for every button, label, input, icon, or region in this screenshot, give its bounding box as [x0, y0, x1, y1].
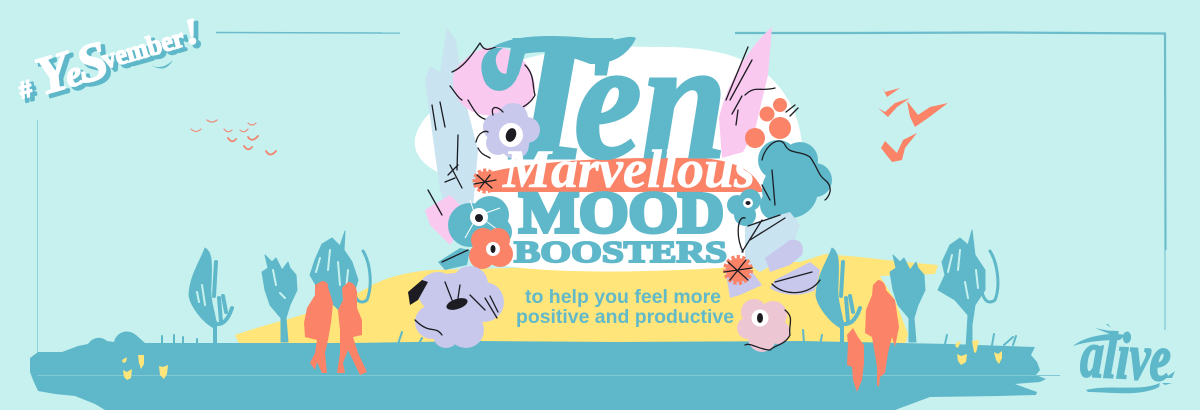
big lavender flower	[415, 266, 504, 348]
small teal flower	[727, 189, 761, 226]
tagline	[516, 286, 734, 328]
yesvember shadow: S	[73, 32, 119, 98]
left tree row	[189, 231, 370, 343]
teal flower with white veins	[448, 196, 512, 247]
lavender flower	[476, 103, 540, 159]
painted ground strip	[30, 331, 1046, 410]
teal leaf flower	[758, 140, 832, 220]
yesvember lettering: e	[60, 52, 87, 95]
yesvember lettering: vember	[99, 23, 188, 75]
teal leaf	[438, 248, 470, 270]
yesvember shadow: !	[183, 13, 208, 56]
couple walking	[304, 281, 367, 375]
coral flower small	[475, 171, 495, 191]
title: Ten	[481, 0, 727, 196]
right bouquet	[719, 27, 832, 352]
small arc birds	[191, 120, 276, 154]
title: Ten: T	[496, 0, 611, 196]
right tree row	[816, 230, 998, 348]
pink petals	[453, 47, 535, 115]
coral flower	[469, 228, 513, 269]
white cloud backdrop	[415, 46, 802, 271]
yesvember lettering: !	[179, 10, 204, 53]
left bouquet	[408, 27, 535, 348]
tree scribble gaps	[197, 250, 978, 305]
main title background brush	[490, 158, 763, 192]
yellow hill	[235, 254, 938, 346]
light blue leaf	[425, 27, 478, 232]
yellow tulips	[122, 340, 1002, 380]
lavender petals	[765, 240, 803, 272]
smile under yesvember	[151, 60, 173, 69]
ten curl	[481, 48, 520, 91]
brush frame	[38, 32, 1166, 375]
yesvember shadow: vember	[103, 26, 192, 78]
title: Marvellous: Marvellous	[502, 139, 755, 199]
yesvember lettering	[9, 3, 207, 112]
title: BOOSTERS: BOOSTERS	[514, 234, 727, 269]
yesvember lettering: Y	[29, 39, 82, 107]
yesvember shadow: e	[64, 55, 91, 98]
tagline: positive and productive	[516, 306, 734, 328]
grass tufts	[162, 330, 1016, 345]
light horizon line	[37, 374, 1060, 376]
pink flower	[737, 299, 790, 352]
title: MOOD: MOOD	[519, 180, 724, 245]
yesvember lettering: S	[69, 29, 115, 95]
ten swash	[493, 36, 636, 64]
yesvember badge	[9, 2, 211, 116]
light blue leaf right	[745, 212, 800, 272]
flower outline	[450, 43, 535, 120]
yesvember shadow: Y	[33, 42, 86, 110]
tagline: to help you feel more	[525, 286, 721, 308]
title: Ten: en	[574, 6, 727, 194]
yesvember shadow	[13, 6, 211, 116]
pink feather leaf	[719, 27, 772, 158]
parent and child	[847, 280, 899, 392]
pink lower leaf	[425, 195, 470, 245]
large birds	[878, 87, 948, 162]
berries	[745, 98, 791, 148]
sprigs	[428, 102, 462, 215]
yesvember lettering: #	[15, 75, 36, 105]
black brush mark	[408, 280, 428, 305]
yesvember shadow: #	[19, 78, 40, 108]
coral flower right	[726, 258, 750, 282]
